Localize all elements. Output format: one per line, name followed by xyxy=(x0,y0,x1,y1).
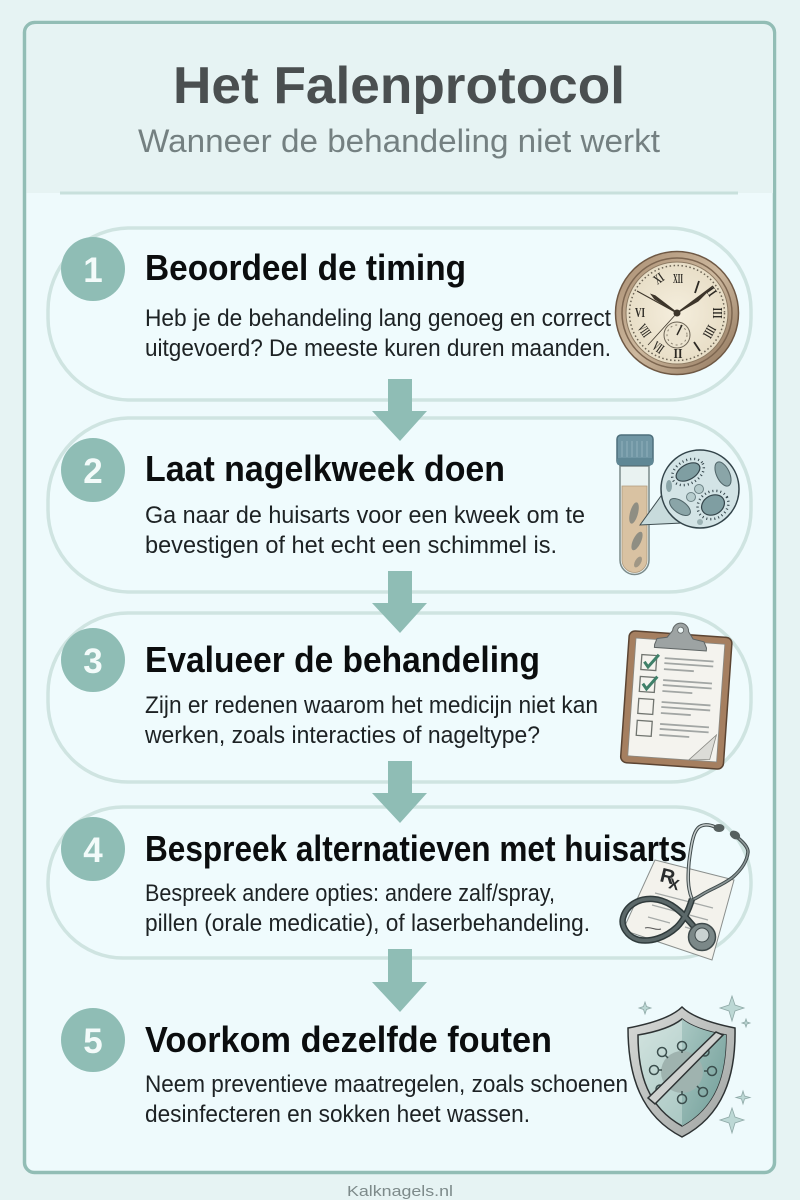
step 1 xyxy=(61,237,611,362)
icon: shield with crossed-out virus xyxy=(628,1007,735,1137)
icon: wall clock: VII xyxy=(649,339,666,357)
panel: step 1 outline xyxy=(48,228,751,400)
step 1 number: 1 xyxy=(83,251,103,290)
step 5 heading: Voorkom dezelfde fouten xyxy=(145,1019,552,1060)
step 4 body: Bespreek andere opties: andere zalf/spray, xyxy=(145,880,555,907)
icon: test tube with microscope view xyxy=(617,435,739,574)
panel: step 2 outline xyxy=(48,418,751,592)
panel: step 4 outline xyxy=(48,807,751,958)
arrow: step 2 to 3 xyxy=(372,571,427,633)
step 5 body xyxy=(145,1071,628,1128)
step 4 heading: Bespreek alternatieven met huisarts xyxy=(145,828,687,869)
icon: wall clock: VI xyxy=(635,306,645,321)
step 2 body xyxy=(145,502,585,559)
step 1 heading: Beoordeel de timing xyxy=(145,247,466,288)
step 1 body xyxy=(145,305,611,362)
icon: wall clock: III xyxy=(709,308,724,318)
step 4 body: pillen (orale medicatie), of laserbehandeling. xyxy=(145,910,590,937)
icon: clipboard checklist xyxy=(620,620,733,769)
step 3 body: Zijn er redenen waarom het medicijn niet kan xyxy=(145,692,598,719)
step 5 number: 5 xyxy=(83,1022,103,1061)
icon: wall clock: XII xyxy=(673,272,683,287)
step 2 body: bevestigen of het echt een schimmel is. xyxy=(145,532,557,559)
subtitle: Wanneer de behandeling niet werkt xyxy=(138,123,660,159)
arrow: step 3 to 4 xyxy=(372,761,427,823)
icon: stethoscope on prescription xyxy=(623,824,748,960)
step 1 body: uitgevoerd? De meeste kuren duren maanden. xyxy=(145,335,611,362)
step 2 number xyxy=(61,438,125,502)
icon: sparkles xyxy=(639,996,750,1133)
step 3 number xyxy=(61,628,125,692)
icon: stethoscope on prescription: R xyxy=(658,865,678,889)
icon: stethoscope on prescription: X xyxy=(667,875,681,894)
title: Het Falenprotocol xyxy=(173,57,625,115)
step 4 number: 4 xyxy=(83,831,103,870)
step 5 xyxy=(61,1008,628,1128)
step 1 body: Heb je de behandeling lang genoeg en correct xyxy=(145,305,611,332)
step 2 xyxy=(61,438,585,559)
step 4 xyxy=(61,817,687,937)
step 5 number xyxy=(61,1008,125,1072)
icon: wall clock: IIII xyxy=(701,323,720,341)
icon: wall clock: XI xyxy=(651,271,667,288)
step 3 number: 3 xyxy=(83,642,103,681)
icon: wall clock: II xyxy=(674,347,682,362)
step 3 body xyxy=(144,692,598,749)
step 5 body: desinfecteren en sokken heet wassen. xyxy=(145,1101,530,1128)
step 5 body: Neem preventieve maatregelen, zoals schoenen xyxy=(145,1071,628,1098)
arrow: step 4 to 5 xyxy=(372,949,427,1012)
step 2 heading: Laat nagelkweek doen xyxy=(145,448,505,489)
step 3 xyxy=(61,628,598,749)
icon: wall clock: VIII xyxy=(634,322,653,341)
step 4 number xyxy=(61,817,125,881)
step 4 body xyxy=(145,880,590,937)
footer credit: Kalknagels.nl xyxy=(347,1183,453,1200)
step 2 body: Ga naar de huisarts voor een kweek om te xyxy=(145,502,585,529)
step 3 heading: Evalueer de behandeling xyxy=(145,639,540,680)
icon: wall clock xyxy=(616,252,738,374)
step 3 body: werken, zoals interacties of nageltype? xyxy=(144,722,540,749)
panel: step 3 outline xyxy=(48,613,751,782)
step 1 number xyxy=(61,237,125,301)
step 2 number: 2 xyxy=(83,452,103,491)
arrow: step 1 to 2 xyxy=(372,379,427,441)
icon: wall clock: II xyxy=(702,285,719,300)
